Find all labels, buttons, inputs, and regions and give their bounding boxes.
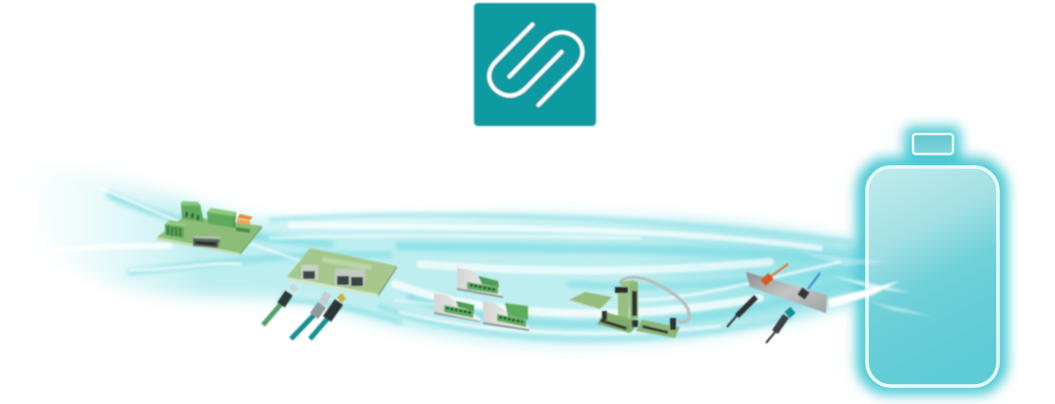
terminal block wide: [207, 208, 236, 229]
light beams entering battery: [800, 252, 932, 316]
battery cap: [913, 134, 953, 154]
product: PCB board-to-board set: [569, 277, 689, 338]
D-sub connector: [193, 236, 220, 248]
orange connector: [763, 264, 788, 283]
vertical board: [615, 280, 638, 322]
product: terminal block PCB: [157, 201, 262, 255]
PCB board: [157, 216, 262, 253]
lower right board: [632, 318, 680, 338]
white light streaks: [50, 188, 840, 333]
small flat board: [569, 292, 612, 309]
terminal block left: [165, 220, 187, 238]
connector right: [483, 301, 529, 331]
battery glow: [856, 126, 1008, 395]
terminal block tall: [181, 201, 204, 222]
board: [287, 248, 397, 294]
cable green: [263, 286, 296, 325]
product: M12 panel connectors: [727, 264, 827, 343]
connector left: [434, 293, 480, 322]
cable teal black: [310, 296, 344, 339]
battery body: [867, 167, 998, 386]
connector top: [457, 268, 503, 298]
icon: paperclip logo tile: [474, 3, 596, 126]
metal plate: [746, 272, 827, 313]
product: ethernet cables: [263, 286, 344, 339]
ribbon cable: [620, 277, 689, 322]
small green connector: [236, 227, 250, 233]
black sensor cable right: [766, 310, 793, 343]
energy flow band: [30, 165, 880, 344]
battery: [856, 126, 1008, 395]
jack single: [301, 265, 318, 280]
teal depth strands: [110, 195, 860, 340]
cable teal silver: [291, 293, 328, 339]
orange connector: [237, 214, 253, 220]
lower left board: [597, 311, 640, 333]
product: RJ45 interface board: [287, 248, 397, 297]
jack double: [335, 269, 365, 286]
black sensor cable left: [727, 297, 756, 327]
blue connector: [801, 273, 820, 297]
product: angled connectors: [434, 268, 529, 331]
